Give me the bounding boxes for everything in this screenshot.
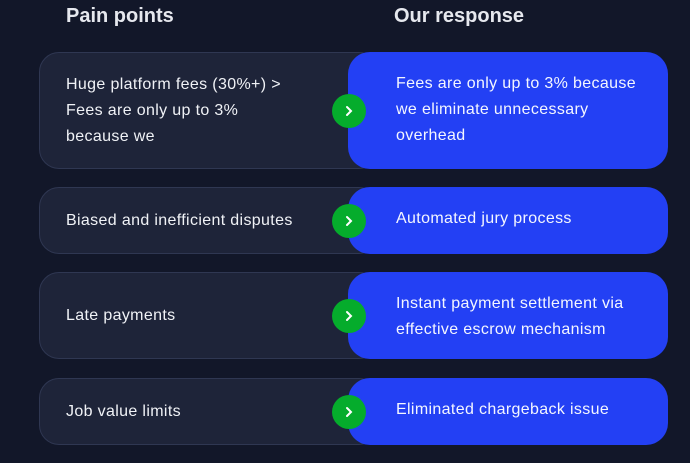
row 3 (39, 272, 668, 359)
icon: green arrow (332, 94, 366, 128)
row 2 (39, 187, 668, 254)
response: jury: Automated jury process (396, 210, 572, 227)
pain: fees: because we (66, 128, 155, 144)
icon: green arrow (332, 204, 366, 238)
pain: job value (39, 378, 379, 445)
response: fees: we eliminate unnecessary (396, 101, 588, 118)
response: fees (348, 52, 668, 169)
response: jury (348, 187, 668, 254)
pain: late payments (39, 272, 379, 359)
response: escrow (348, 272, 668, 359)
pain: disputes (39, 187, 379, 254)
response: chargeback: Eliminated chargeback issue (396, 401, 609, 418)
row 1 (39, 52, 668, 169)
icon: green arrow (332, 298, 366, 332)
pain: fees: Fees are only up to 3% (66, 102, 238, 118)
response: chargeback (348, 378, 668, 445)
heading: pain points: Pain points (66, 5, 174, 27)
row 4 (39, 378, 668, 445)
pain: disputes: Biased and inefficient disputes (66, 212, 293, 228)
pain: late payments: Late payments (66, 306, 176, 324)
pain: fees: Huge platform fees (30%+) > (66, 76, 281, 92)
response: escrow: Instant payment settlement via (396, 295, 624, 312)
response: fees: overhead (396, 127, 466, 144)
pain: job value: Job value limits (66, 402, 181, 420)
response: fees: Fees are only up to 3% because (396, 75, 636, 92)
icon: green arrow (332, 394, 366, 428)
response: escrow: effective escrow mechanism (396, 321, 606, 338)
heading: our response: Our response (394, 5, 524, 27)
pain: fees (39, 52, 379, 169)
